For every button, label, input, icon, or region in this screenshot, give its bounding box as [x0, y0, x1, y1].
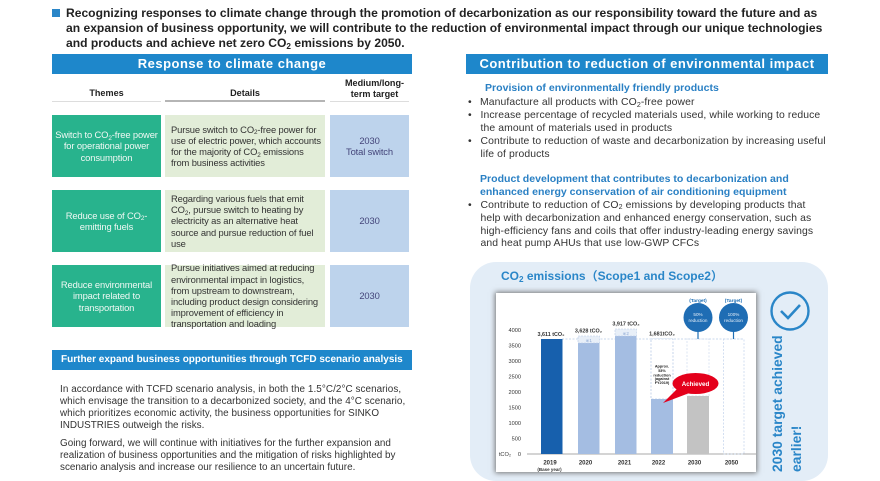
target bubble 100%: [719, 298, 748, 339]
baseline and reference line: [527, 339, 756, 454]
row 3 theme: Reduce environmental: [61, 279, 152, 290]
bar 2020: [578, 336, 600, 454]
intro text: Recognizing responses to climate change through the promotion of decarbonization as our responsibility toward the future and as: [66, 6, 817, 20]
row 3 target: [330, 265, 409, 327]
row 3 details: including product design considering: [171, 296, 318, 307]
subheading: product development: enhanced energy conservation of air conditioning equipment: [480, 186, 786, 198]
subheading: provision: Provision of environmentally friendly products: [485, 82, 719, 94]
intro text: an expansion of business opportunity, we will contribute to the reduction of environmental impact through our unique technologies: [66, 21, 822, 35]
bullet list: provision: Manufacture all products with CO2-free power: [480, 97, 695, 109]
bullet list: product development: •: [468, 200, 472, 210]
heading: contribution to reduction: Contribution to reduction of environmental impact: [479, 56, 815, 71]
text block: environmentally friendly products: [468, 82, 826, 160]
bullet list: provision: Contribute to reduction of waste and decarbonization by increasing useful: [480, 136, 826, 147]
y axis labels: 500: [512, 436, 521, 442]
row 1 details: [165, 115, 325, 177]
table column heading: target: [345, 78, 404, 99]
row 2 details: [165, 190, 325, 252]
text block: TCFD analysis: scenario analysis and increase our resilience to an uncertain future.: [60, 462, 355, 473]
bullet list: provision: •: [468, 110, 472, 121]
x axis labels: 2021: [618, 460, 632, 466]
row 1 theme: [52, 115, 161, 177]
row 2 target: [330, 190, 409, 252]
x axis labels: 2030: [688, 460, 702, 466]
bullet list: provision: [468, 97, 826, 160]
row 1 details: for the majority of CO2 emissions: [171, 146, 304, 159]
callout: 2030 target achieved earlier: earlier!: [788, 426, 804, 472]
bullet list: provision: •: [468, 97, 472, 108]
table column heading: themes: Themes: [89, 88, 124, 98]
row 2 details: use: [171, 238, 186, 249]
target bubble 100%: (Target): [725, 298, 743, 304]
target bubble 100%: 100%: [728, 312, 739, 317]
row 2 theme: Reduce use of CO2-: [66, 210, 147, 222]
x axis labels: (Base year): [537, 467, 562, 472]
y axis labels: 4000: [509, 328, 521, 334]
row 2 target: 2030: [359, 215, 380, 226]
row 2 details: source and pursue reduction of fuel: [171, 227, 313, 238]
x axis labels: 2022: [652, 460, 666, 466]
y axis labels: 1500: [509, 406, 521, 412]
row 3 details: from upstream to downstream,: [171, 285, 294, 296]
callout: achieved: [663, 373, 718, 403]
intro statement: [52, 6, 822, 51]
target bubble 50%: (Target): [689, 298, 707, 304]
table column heading: details: Details: [230, 88, 260, 98]
text block: TCFD analysis: [60, 384, 405, 473]
text block: TCFD analysis: realization of business opportunities and the mitigation of risks highlighted by: [60, 450, 395, 461]
icon: square bullet: [52, 9, 60, 17]
intro text: and products and achieve net zero CO2 emissions by 2050.: [66, 36, 405, 51]
row 2 details: CO2, pursue switch to heating by: [171, 204, 303, 217]
reduction note: [653, 364, 671, 385]
bar value labels: 3,611 tCO₂: [538, 332, 565, 338]
row 3 details: Pursue initiatives aimed at reducing: [171, 262, 314, 273]
row 2 details: Regarding various fuels that emit: [171, 193, 304, 204]
chart title: CO2 emissions（Scope1 and Scope2）: [501, 268, 723, 284]
row 3 details: environmental impact in logistics,: [171, 274, 304, 285]
row 1 theme: Switch to CO2-free power: [55, 129, 158, 142]
bar 2021: [615, 329, 636, 454]
heading: response to climate change: Response to climate change: [138, 56, 326, 71]
table column heading: target: Medium/long-: [345, 78, 404, 88]
y axis labels: [499, 328, 521, 458]
text block: TCFD analysis: In accordance with TCFD scenario analysis, in both the 1.5°C/2°C scenarios,: [60, 384, 401, 394]
subheading: product development: Product development that contributes to decarbonization and: [480, 173, 789, 185]
bullet list: product development: Contribute to reduction of CO2 emissions by developing products that: [480, 200, 805, 211]
text block: TCFD analysis: which prioritizes economic activity, the business opportunities for SINKO: [60, 408, 379, 418]
reduction note: (against: [655, 377, 670, 381]
row 1 target: Total switch: [346, 146, 393, 157]
y axis labels: 0: [518, 452, 521, 458]
row 1 target: [330, 115, 409, 177]
panel: CO2 emissions: [470, 262, 828, 481]
y axis labels: 3000: [509, 359, 521, 365]
reduction note: 53%: [658, 369, 666, 373]
row 1 details: Pursue switch to CO2-free power for: [171, 124, 316, 136]
table column heading: target: term target: [351, 89, 398, 99]
x axis labels: 2019: [543, 460, 557, 466]
subheading: product development: [480, 173, 789, 198]
reduction note: Approx.: [655, 364, 669, 368]
row 3 details: improvement of efficiency in: [171, 307, 283, 318]
bar 2019: [541, 339, 562, 454]
row 3 details: [165, 265, 325, 327]
bullet list: product development: [468, 200, 813, 249]
row 1 theme: consumption: [81, 152, 132, 163]
bullet list: provision: Increase percentage of recycled materials used, while working to reduce: [480, 110, 820, 121]
row 3 details: transportation and loading: [171, 318, 276, 329]
row 3 target: 2030: [359, 290, 380, 301]
text block: TCFD analysis: which envisage the transition to a decarbonized society, and the 4°C scenario,: [60, 396, 405, 406]
y axis labels: 3500: [509, 344, 521, 350]
bar 2020: ※1: [586, 338, 592, 343]
target bubble 100%: reduction: [724, 318, 743, 323]
bar value labels: 1,681tCO₂: [649, 332, 675, 338]
icon: check mark: [770, 291, 810, 331]
target bubble 50%: [684, 298, 712, 339]
callout: achieved: Achieved: [682, 381, 709, 388]
callout: 2030 target achieved earlier: [769, 335, 804, 472]
y axis labels: 2500: [509, 374, 521, 380]
bar value labels: 3,917 tCO₂: [612, 322, 640, 328]
row 1 theme: for operational power: [64, 140, 149, 151]
bullet list: product development: high-efficiency fans and coils that offer industry-leading energy savings: [480, 226, 813, 236]
bar 2050: [724, 339, 744, 454]
x axis labels: 2050: [725, 460, 739, 466]
bullet list: provision: the amount of materials used in products: [480, 123, 672, 134]
heading: TCFD scenario analysis: Further expand business opportunities through TCFD scenario analysis: [61, 354, 403, 365]
reduction note: FY2019): [655, 381, 670, 385]
bullet list: product development: and heat pump AHUs that use low-GWP CFCs: [480, 238, 699, 249]
chart card background: [496, 293, 756, 472]
row 1 details: from business activities: [171, 157, 265, 168]
target bubble 50%: 50%: [693, 312, 703, 317]
row 1 target: 2030: [359, 135, 380, 146]
target bubble 50%: reduction: [689, 318, 708, 323]
x axis labels: [537, 460, 739, 472]
callout: 2030 target achieved earlier: 2030 target achieved: [769, 335, 785, 472]
text block: TCFD analysis: INDUSTRIES outweigh the risks.: [60, 420, 204, 431]
bar 2030: [687, 339, 709, 454]
reduction note: reduction: [653, 374, 671, 378]
bar 2022: [651, 339, 673, 454]
heading: response to climate change: [52, 54, 412, 74]
x axis labels: 2020: [579, 460, 593, 466]
bullet list: product development: help with decarbonization and enhanced energy conservation, such as: [480, 212, 811, 224]
bullet list: provision: •: [468, 136, 472, 147]
bar value labels: [538, 322, 675, 338]
bar 2021: ※2: [623, 331, 629, 336]
y axis labels: 2000: [509, 390, 521, 396]
row 3 theme: transportation: [79, 302, 134, 313]
row 2 theme: [52, 190, 161, 252]
text block: TCFD analysis: Going forward, we will continue with initiatives for the further expansion and: [60, 438, 391, 449]
bullet list: provision: life of products: [480, 148, 550, 160]
y axis labels: tCO₂: [499, 452, 511, 458]
intro text: [66, 6, 822, 51]
row 1 details: use of electric power, which accounts: [171, 135, 321, 146]
heading: contribution to reduction: [466, 54, 828, 74]
row 2 details: electricity as an alternative heat: [171, 215, 298, 226]
row 2 theme: emitting fuels: [80, 221, 133, 232]
text block: product development: [468, 173, 813, 249]
row 3 theme: impact related to: [73, 290, 140, 301]
y axis labels: 1000: [509, 421, 521, 427]
heading: TCFD scenario analysis: [52, 350, 412, 370]
row 3 theme: [52, 265, 161, 327]
bar value labels: 3,628 tCO₂: [575, 328, 603, 334]
